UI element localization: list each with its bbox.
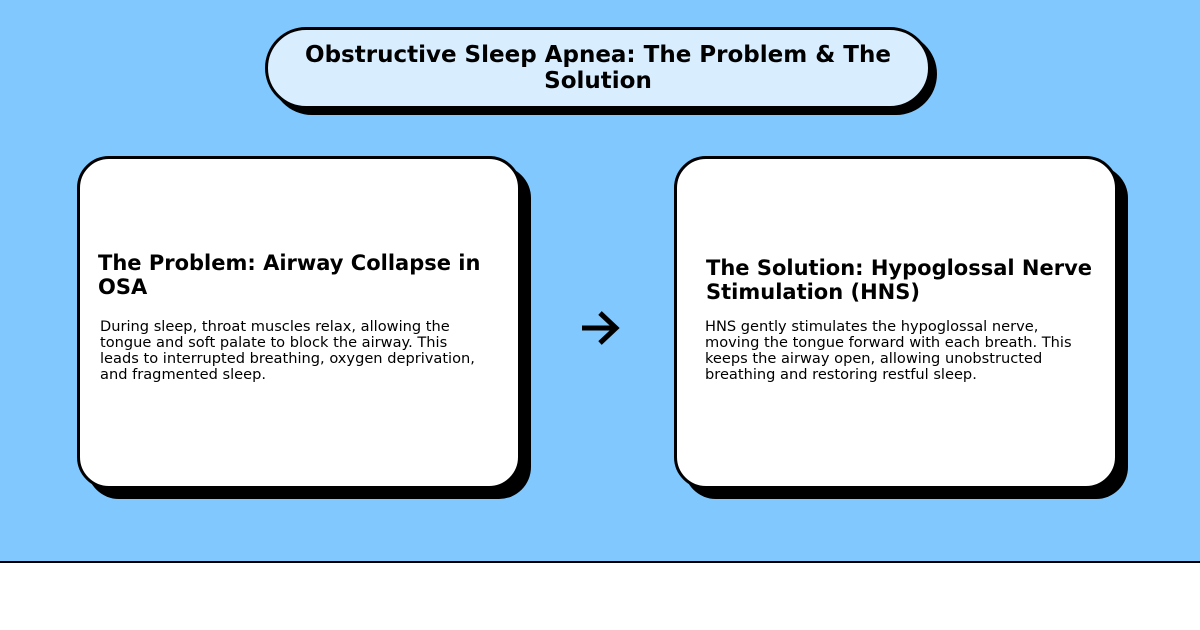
panel: solution — [674, 156, 1118, 489]
text: solution: moving the tongue forward with each breath. This — [705, 334, 1072, 351]
text: problem — [100, 318, 475, 383]
title: Obstructive Sleep Apnea: The Problem & The Solution — [305, 42, 891, 94]
arrow — [582, 311, 620, 345]
text: solution — [705, 318, 1072, 383]
text: problem: and fragmented sleep. — [100, 366, 266, 383]
text: problem: leads to interrupted breathing, oxygen deprivation, — [100, 350, 475, 367]
text: solution: HNS gently stimulates the hypoglossal nerve, — [705, 318, 1038, 335]
text: problem: During sleep, throat muscles relax, allowing the — [100, 318, 450, 335]
title — [265, 27, 931, 109]
heading: solution: The Solution: Hypoglossal Nerve Stimulation (HNS) — [706, 256, 1092, 304]
text: problem: tongue and soft palate to block the airway. This — [100, 334, 447, 351]
text: solution: keeps the airway open, allowing unobstructed — [705, 350, 1042, 367]
text: solution: breathing and restoring restful sleep. — [705, 366, 977, 383]
heading: problem: The Problem: Airway Collapse in OSA — [98, 251, 480, 299]
panel: problem — [77, 156, 521, 489]
